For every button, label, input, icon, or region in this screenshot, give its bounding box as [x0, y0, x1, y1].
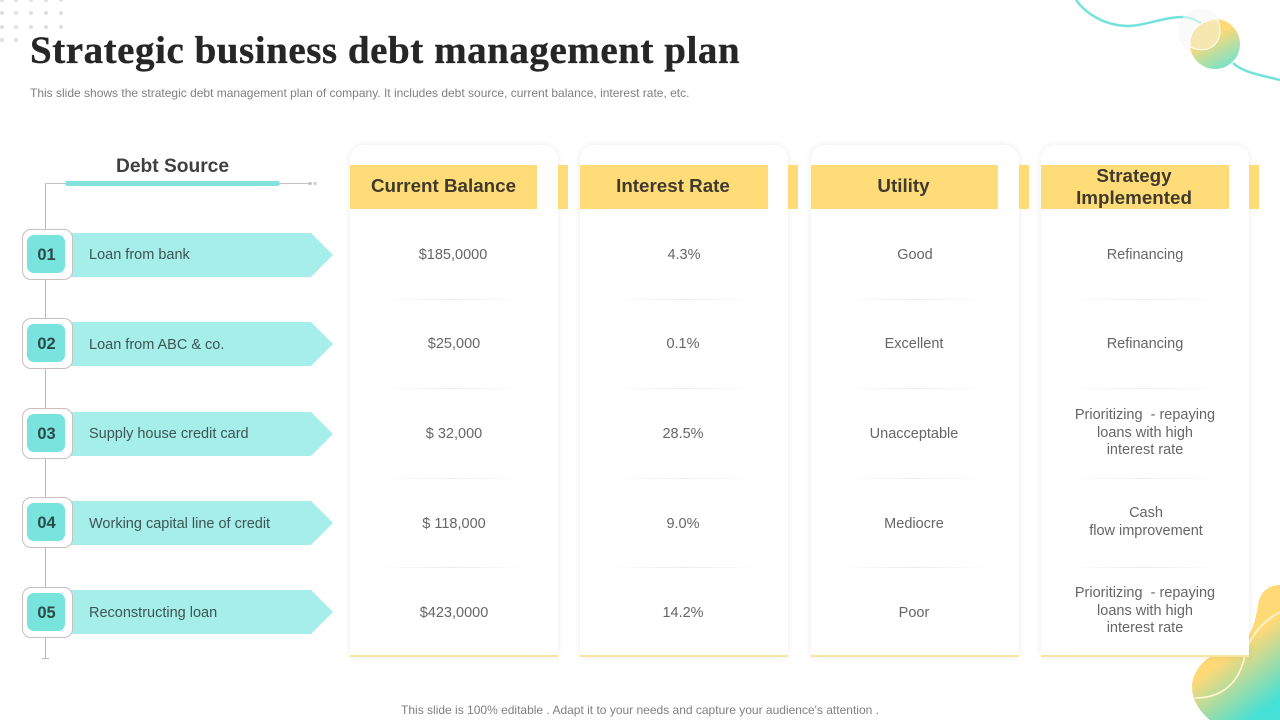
value: Poor	[899, 605, 929, 621]
number badge	[22, 229, 73, 280]
panel: strategy implemented	[1041, 145, 1249, 657]
label: Reconstructing loan	[89, 605, 217, 621]
number badge	[22, 318, 73, 369]
panel: debt source	[42, 156, 317, 659]
number badge: 03	[37, 425, 56, 443]
number badge	[22, 497, 73, 548]
number badge: 02	[37, 335, 56, 353]
row 01: loan from bank	[22, 229, 333, 280]
row 02: loan from ABC	[22, 318, 333, 369]
heading: interest rate	[580, 165, 768, 209]
footer note: This slide is 100% editable . Adapt it to your needs and capture your audience's attention .	[401, 703, 879, 717]
heading underline	[45, 181, 317, 186]
arrow banner	[70, 590, 333, 634]
value: Prioritizing - repaying	[1075, 407, 1215, 423]
value: Good	[897, 247, 933, 263]
panel: interest rate	[580, 145, 788, 657]
header strip: interest rate	[788, 165, 798, 209]
value: $ 118,000	[422, 516, 486, 532]
icon: decorative globe and wave, top right	[1075, 0, 1280, 82]
value: Refinancing	[1107, 336, 1183, 352]
arrow banner	[70, 233, 333, 277]
value: 0.1%	[666, 336, 700, 352]
value: Cash	[1129, 505, 1163, 521]
label: Loan from ABC & co.	[89, 337, 224, 353]
arrow banner	[70, 322, 333, 366]
value: 9.0%	[666, 516, 700, 532]
value: 4.3%	[667, 247, 701, 263]
number badge	[22, 587, 73, 638]
value: $25,000	[428, 336, 480, 352]
value: loans with high	[1097, 603, 1193, 619]
heading: current balance	[350, 165, 537, 209]
heading: utility: Utility	[877, 175, 930, 196]
value: $423,0000	[420, 605, 488, 621]
subtitle: This slide shows the strategic debt management plan of company. It includes debt source, current balance, interest rate, etc.	[30, 86, 689, 100]
heading: strategy implemented	[1041, 165, 1229, 209]
header strip: strategy implemented	[1249, 165, 1259, 209]
value	[1075, 585, 1215, 636]
value: $ 32,000	[426, 426, 482, 442]
value: $185,0000	[419, 247, 487, 263]
value: Excellent	[885, 336, 943, 352]
header strip: current balance	[558, 165, 568, 209]
heading: strategy implemented: Strategy	[1096, 165, 1172, 186]
timeline connector	[45, 183, 46, 659]
heading: debt source: Debt Source	[116, 156, 229, 177]
number badge: 04	[37, 514, 56, 532]
value	[1089, 505, 1203, 539]
title: Strategic business debt management plan	[30, 29, 740, 72]
value: interest rate	[1107, 442, 1183, 458]
label: Working capital line of credit	[89, 516, 270, 532]
value: 14.2%	[662, 605, 704, 621]
heading: strategy implemented: Implemented	[1076, 187, 1192, 208]
value: Mediocre	[884, 516, 944, 532]
value	[1075, 407, 1215, 458]
value: 28.5%	[662, 426, 704, 442]
arrow banner	[70, 412, 333, 456]
value: loans with high	[1097, 425, 1193, 441]
value: flow improvement	[1089, 523, 1203, 539]
decorative dot grid	[0, 0, 63, 42]
label: Supply house credit card	[89, 426, 249, 442]
number badge: 05	[37, 604, 56, 622]
decorative blob, bottom right	[1192, 585, 1280, 720]
row 04: working capital line of credit	[22, 497, 333, 548]
header strip: utility	[1019, 165, 1029, 209]
timeline end tick	[42, 658, 49, 659]
label: Loan from bank	[89, 247, 190, 263]
value: Unacceptable	[870, 426, 958, 442]
heading: current balance: Current Balance	[371, 175, 516, 196]
number badge: 01	[37, 246, 56, 264]
panel: current balance	[350, 145, 558, 657]
panel: utility	[811, 145, 1019, 657]
value: Prioritizing - repaying	[1075, 585, 1215, 601]
heading: interest rate: Interest Rate	[616, 175, 730, 196]
row 03: supply house credit card	[22, 408, 333, 459]
number badge	[22, 408, 73, 459]
arrow banner	[70, 501, 333, 545]
value: interest rate	[1107, 620, 1183, 636]
value: Refinancing	[1107, 247, 1183, 263]
row 05: reconstructing loan	[22, 587, 333, 638]
heading: utility	[811, 165, 998, 209]
